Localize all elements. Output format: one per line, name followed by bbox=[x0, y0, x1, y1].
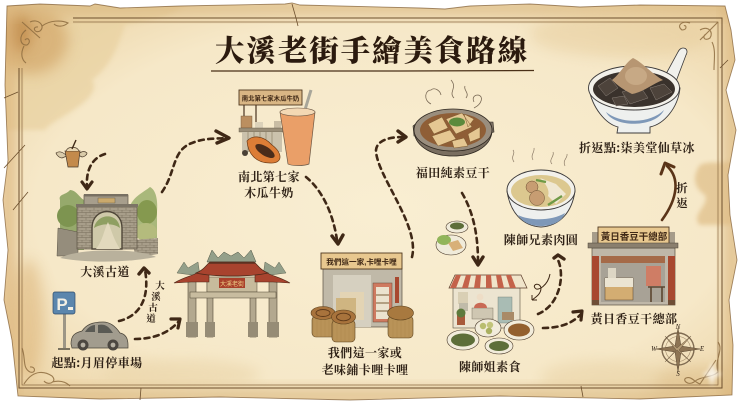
vertical label: old trail direction: 大 bbox=[155, 280, 165, 292]
arrow: tofu to Chen shop bbox=[462, 193, 483, 265]
arrow: small curl note bbox=[532, 274, 550, 300]
label: Chen vegetarian: 陳師姐素食 bbox=[459, 359, 521, 374]
arrow: drink to old trail bbox=[82, 154, 105, 189]
label: turnaround grass jelly: 折返點:柒美堂仙草冰 bbox=[579, 139, 695, 156]
icon: car bbox=[71, 322, 128, 350]
label: curry shop: 老味鋪卡哩卡哩 bbox=[322, 362, 408, 377]
arrow: parking to old trail bbox=[119, 268, 149, 321]
label: papaya milk bbox=[238, 169, 300, 200]
label: Daxi old trail: 大溪古道 bbox=[80, 264, 130, 279]
icon: Chen vegetarian shop and plates bbox=[447, 275, 534, 354]
vertical label: turnaround: 返 bbox=[676, 197, 688, 210]
label: Futian tofu: 福田純素豆干 bbox=[416, 165, 490, 180]
icon: meatball soup bowl bbox=[507, 148, 575, 227]
label: meatballs: 陳師兄素肉圓 bbox=[504, 232, 578, 247]
icon: compass rose: W bbox=[651, 345, 658, 353]
label: start parking: 起點:月眉停車場 bbox=[51, 354, 143, 371]
icon: curry shop and baskets bbox=[311, 253, 414, 342]
arrow: trail to papaya milk bbox=[162, 131, 229, 192]
icon: parking sign: P bbox=[56, 295, 68, 314]
icon: takeaway drink with wings bbox=[56, 140, 87, 167]
arrow: Chen shop to Huang Ri Xiang bbox=[543, 311, 582, 328]
vertical label: old trail direction bbox=[146, 280, 165, 325]
vertical label: old trail direction: 古 bbox=[148, 302, 158, 314]
vertical label: old trail direction: 道 bbox=[146, 313, 156, 325]
vertical label: old trail direction: 溪 bbox=[151, 291, 161, 303]
icon: grass jelly bowl with spoon bbox=[588, 48, 687, 133]
icon: Huang Ri Xiang shop: 黃日香豆干總部 bbox=[601, 231, 668, 243]
icon: side plates bbox=[436, 221, 468, 255]
arrow: solid turnaround bbox=[661, 163, 676, 220]
label: curry shop bbox=[322, 345, 408, 377]
arrow: papaya milk to curry shop bbox=[306, 177, 343, 244]
vertical label: turnaround: 折 bbox=[676, 181, 688, 195]
icon: Daxi old street archway bbox=[174, 250, 290, 337]
icon: Huang Ri Xiang shop bbox=[588, 227, 678, 305]
icon: Daxi old street archway: 大溪老街 bbox=[220, 279, 244, 288]
arrow: curry shop to tofu pot bbox=[376, 131, 413, 257]
label: papaya milk: 木瓜牛奶 bbox=[244, 185, 294, 200]
icon: compass rose: S bbox=[676, 370, 680, 378]
icon: parking sign bbox=[53, 292, 75, 350]
sparkle mark bbox=[702, 362, 722, 386]
vertical label: turnaround bbox=[676, 181, 688, 210]
label: curry shop: 我們這一家或 bbox=[328, 345, 402, 360]
icon: Daxi old trail stone gate bbox=[57, 187, 158, 262]
icon: papaya milk stand: 南北第七家木瓜牛奶 bbox=[242, 94, 300, 102]
icon: compass rose: N bbox=[675, 323, 681, 331]
arrow: parking to gate bbox=[135, 319, 180, 339]
icon: compass rose bbox=[651, 323, 705, 378]
title: 大溪老街手繪美食路線 bbox=[215, 28, 529, 70]
icon: compass rose: E bbox=[699, 345, 705, 353]
label: papaya milk: 南北第七家 bbox=[238, 169, 300, 184]
arrow: Chen shop to meatballs bbox=[538, 255, 564, 314]
label: Huang Ri Xiang: 黃日香豆干總部 bbox=[591, 311, 677, 326]
icon: tofu claypot with steam bbox=[413, 80, 494, 156]
icon: curry shop and baskets: 我們這一家,卡哩卡哩 bbox=[326, 256, 397, 266]
icon: papaya milk stand bbox=[239, 90, 315, 166]
